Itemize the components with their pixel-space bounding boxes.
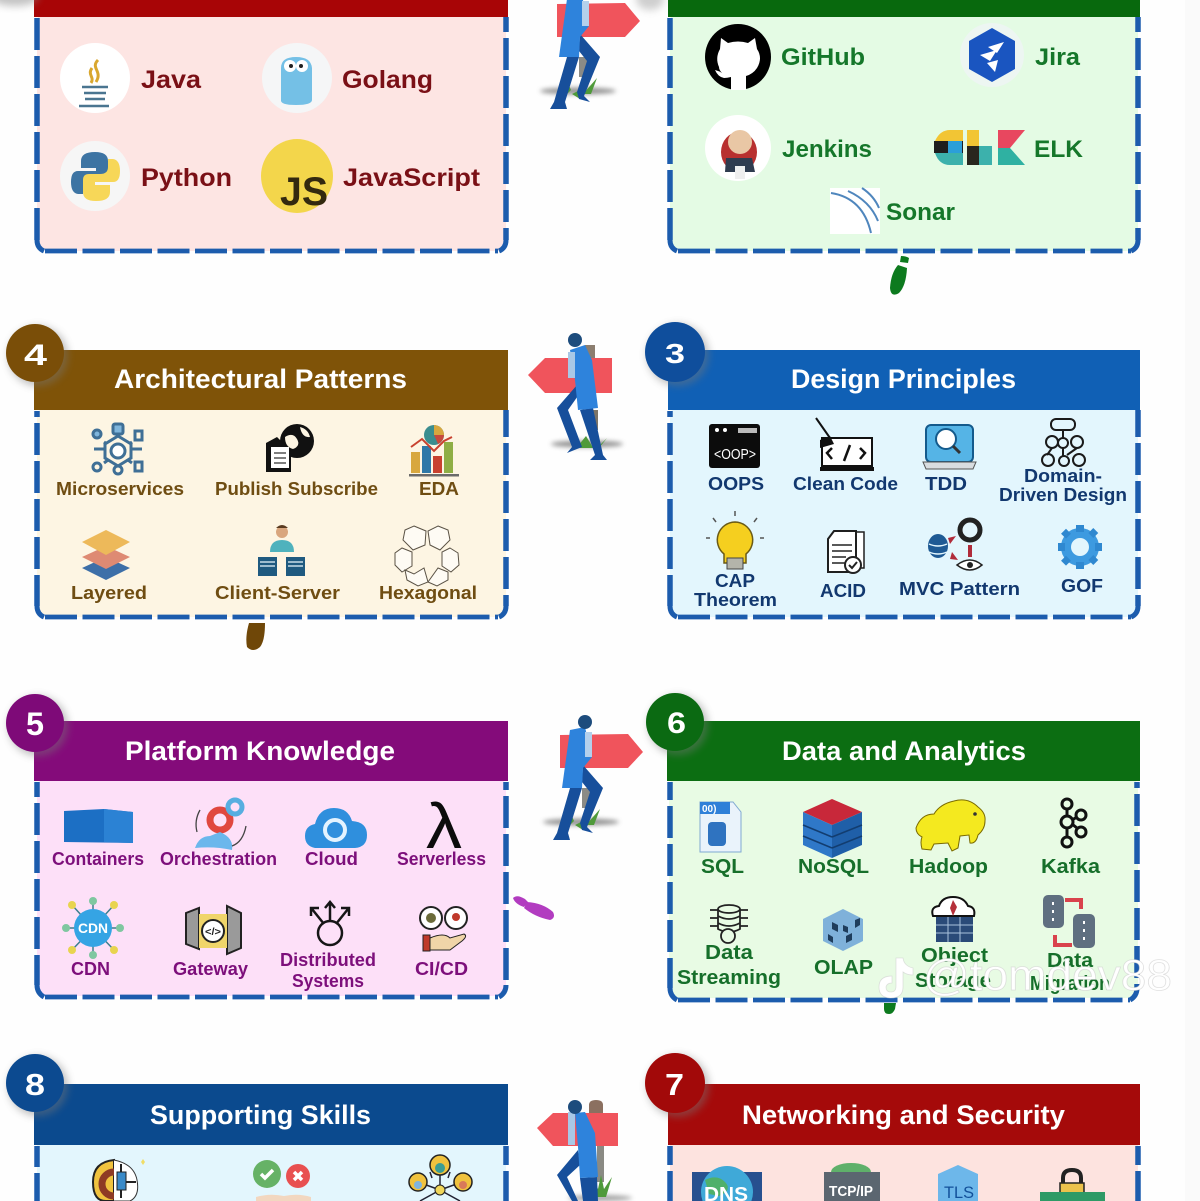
icon: clean code [816,418,874,471]
title: data and analytics: Data and Analytics [782,736,1026,766]
badge: 8 [6,1054,68,1116]
icon: JavaScript: JS [280,170,328,214]
icon: domain driven design [1042,419,1085,466]
label: EDA: EDA [419,479,459,499]
label: Domain-Driven Design [999,466,1127,505]
panel: supporting skills [34,1084,508,1201]
icon: hexagonal [395,526,459,586]
panel: data and analytics [667,721,1140,1000]
icon: Hadoop elephant [916,800,985,851]
label: ELK: ELK [1034,136,1084,163]
panel: platform knowledge [34,721,508,997]
label: GOF: GOF [1061,576,1103,596]
footprint: green small [884,1003,896,1014]
panel: tools [668,0,1140,251]
badge: 5 [6,694,68,756]
label: Publish Subscribe: Publish Subscribe [215,479,378,499]
label: Layered: Layered [71,583,147,603]
label: ACID: ACID [820,581,866,601]
icon: orchestration [195,800,246,850]
icon: lambda: λ [426,790,462,862]
badge: 3 [645,322,709,386]
icon: supporting skill head [93,1159,145,1201]
icon: publish subscribe [266,424,314,472]
figure: walker with sign top [540,0,640,109]
icon: EDA chart [409,425,459,476]
badge: 8: 8 [25,1067,45,1102]
label: Hadoop: Hadoop [909,856,988,878]
label: Distributed Systems [280,950,376,991]
label: Hexagonal: Hexagonal [379,583,477,603]
icon: ELK [934,130,1025,165]
panel: languages [34,0,508,251]
label: Clean Code: Clean Code [793,474,898,494]
label: Cloud: Cloud [305,849,358,869]
label: Serverless: Serverless [397,849,486,869]
label: CAP Theorem [694,571,777,610]
badge: 7 [645,1053,709,1117]
icon: distributed systems [311,902,349,945]
icon: ACID document [828,531,864,573]
icon: Jira [960,23,1024,87]
footprint: purple [513,896,554,920]
icon: feedback bubbles [253,1160,311,1201]
label: MVC Pattern: MVC Pattern [899,579,1020,599]
label: NoSQL: NoSQL [798,856,869,878]
icon: gateway: </> [205,927,221,938]
label: Distributed Systems: Systems [292,971,364,991]
label: Distributed Systems: Distributed [280,950,376,970]
title: supporting skills: Supporting Skills [150,1100,371,1130]
label: Client-Server: Client-Server [215,583,340,603]
label: Golang: Golang [342,66,433,94]
icon: Golang [262,43,332,113]
badge: 4 [6,324,68,386]
title: architectural patterns: Architectural Patterns [114,364,407,394]
icon: Python [60,141,130,211]
label: Data Migration: Data [1047,950,1094,972]
label: Data Migration [1030,950,1110,995]
label: OOPS: OOPS [708,474,764,494]
label: Object Storage: Object [921,945,988,967]
icon: DNS [692,1166,762,1201]
icon: team network [409,1155,472,1201]
icon: lock [1040,1170,1105,1201]
icon: MVC pattern [928,520,982,570]
badge: 4: 4 [24,339,47,372]
icon: container [64,809,133,843]
label: Data Streaming [677,942,781,989]
label: Object Storage: Storage [915,970,991,992]
label: JavaScript: JavaScript [343,164,481,192]
badge: 6: 6 [667,707,686,740]
icon: object storage [932,897,974,942]
label: Jenkins: Jenkins [782,136,872,163]
label: Sonar: Sonar [886,199,955,226]
label: Python: Python [141,164,232,192]
figure: walker with sign second [528,333,623,460]
title: networking and security: Networking and Security [742,1100,1065,1130]
icon: client server [258,525,305,576]
label: SQL: SQL [701,856,744,878]
icon: Java [60,43,130,113]
footprint: brown [246,623,265,650]
badge: 7: 7 [665,1067,684,1102]
icon: CDN [62,897,124,959]
icon: OOP window: <OOP> [714,446,756,463]
icon: Jenkins [705,115,771,181]
label: GitHub: GitHub [781,44,865,71]
panel header: design principles [668,350,1140,410]
label: Java: Java [141,66,202,94]
badge shadow: top right [636,0,664,10]
icon: Kafka [1061,799,1086,847]
panel header: supporting skills [34,1084,508,1145]
badge shadow: top left [0,0,39,6]
icon: GOF gear [1058,525,1102,569]
icon: cloud [305,808,367,848]
label: Jira: Jira [1035,44,1081,71]
label: OLAP: OLAP [814,957,873,979]
icon: Sonar [830,188,880,234]
panel header: platform knowledge [34,721,508,781]
panel header: languages [34,0,508,17]
panel header: tools [668,0,1140,17]
badge: 5: 5 [26,706,44,742]
icon: GitHub [705,24,771,90]
panel header: data and analytics [667,721,1140,781]
label: Containers: Containers [52,849,144,869]
icon: JavaScript [261,139,333,214]
badge: 3: 3 [665,338,685,369]
title: platform knowledge: Platform Knowledge [125,736,395,766]
badge: 6 [646,693,708,755]
label: CDN: CDN [71,959,110,979]
icon: TCP/IP [824,1163,880,1201]
panel: architectural patterns [34,350,508,617]
label: Data Streaming: Streaming [677,967,781,989]
figure: walker with sign third [543,715,643,840]
panel: design principles [668,350,1140,617]
icon: microservices [93,424,142,474]
icon: TCP/IP: TCP/IP [829,1183,873,1200]
label: Gateway: Gateway [173,959,248,979]
watermark: @tomdev88 [923,951,1172,1000]
label: Domain-Driven Design: Domain- [1024,466,1102,486]
label: Kafka: Kafka [1041,856,1101,878]
icon: SQL [700,802,741,852]
icon: SQL: 00) [702,804,716,815]
panel header: architectural patterns [34,350,508,410]
label: Data Streaming: Data [705,942,754,964]
icon: CAP bulb [706,511,764,569]
icon: data migration [1043,895,1095,948]
footprint: green top [890,256,909,295]
label: Orchestration: Orchestration [160,849,277,869]
icon: CDN: CDN [78,920,108,936]
panel: networking and security [668,1084,1140,1201]
icon: gateway [186,906,241,954]
panel header: networking and security [668,1084,1140,1145]
label: Data Migration: Migration [1030,973,1110,995]
title: design principles: Design Principles [791,364,1016,394]
icon: TDD laptop [923,425,976,469]
label: TDD: TDD [925,474,967,494]
icon: NoSQL [803,799,862,858]
label: CAP Theorem: Theorem [694,590,777,610]
icon: layered [82,530,130,580]
icon: CI/CD [420,907,467,951]
label: Object Storage [915,945,991,992]
icon: TLS shield [938,1165,978,1201]
icon: OOP window [709,424,760,468]
label: CAP Theorem: CAP [715,571,755,591]
figure: walker with sign fourth [537,1100,632,1201]
icon: OLAP cube [823,909,863,951]
icon: data streaming [710,905,748,943]
label: Microservices: Microservices [56,479,184,499]
label: CI/CD: CI/CD [415,959,468,979]
label: Domain-Driven Design: Driven Design [999,485,1127,505]
